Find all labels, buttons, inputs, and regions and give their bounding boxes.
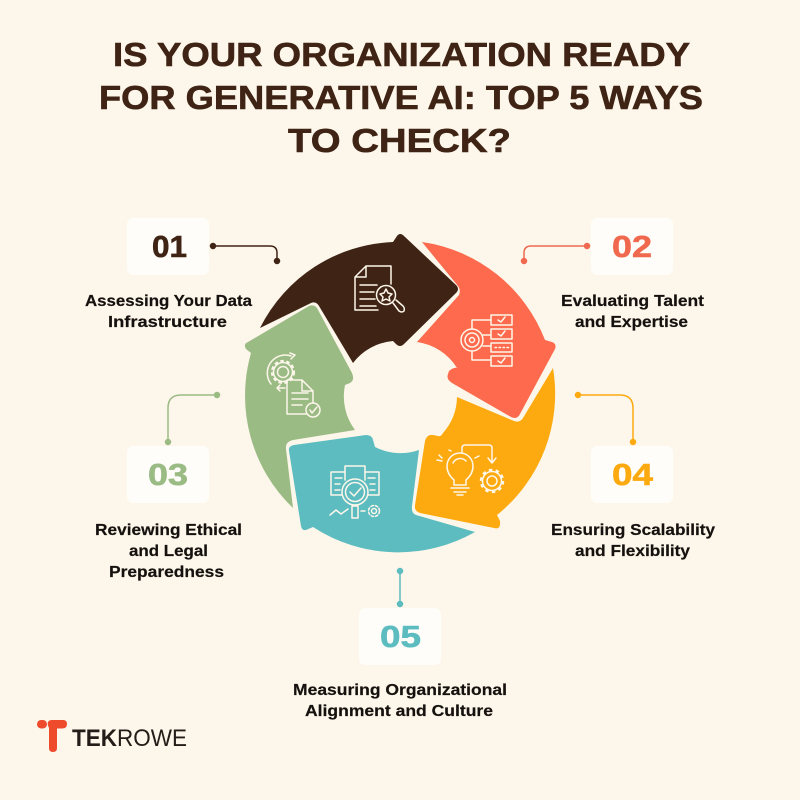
icon: document with star magnifier [355, 266, 404, 312]
card 04: 04 [612, 458, 653, 492]
logo [37, 720, 187, 752]
segment 3: orange arrow [415, 368, 555, 528]
title [99, 37, 703, 160]
connector 04 [576, 392, 636, 444]
label 02 [561, 293, 704, 331]
card 04 [591, 446, 673, 503]
label 05: Alignment and Culture [305, 703, 493, 720]
label 05 [293, 682, 507, 720]
label 01: Assessing Your Data [85, 293, 252, 310]
segment 1: brown arrow [260, 234, 458, 363]
card 03 [127, 446, 209, 503]
icon: target with checklist [461, 315, 512, 366]
cycle diagram [245, 234, 556, 552]
card 01: 01 [152, 230, 187, 264]
icon: gear and document [267, 353, 320, 417]
icon: T mark [37, 720, 67, 752]
label 03: Preparedness [109, 564, 224, 581]
card 05: 05 [380, 620, 421, 654]
label 02: Evaluating Talent [561, 293, 704, 310]
card 01 [127, 218, 209, 275]
connector 02 [522, 244, 590, 264]
label 03: and Legal [129, 543, 208, 560]
label 01 [85, 293, 252, 331]
label 05: Measuring Organizational [293, 682, 507, 699]
card 05 [359, 608, 441, 665]
connector 03 [166, 392, 220, 444]
label 04 [551, 522, 715, 560]
card 03: 03 [148, 458, 188, 492]
title: FOR GENERATIVE AI: TOP 5 WAYS [99, 80, 703, 117]
card 02: 02 [612, 230, 652, 264]
label 04: and Flexibility [575, 543, 690, 560]
title: TO CHECK? [288, 123, 511, 160]
logo wordmark: TEKROWE [72, 725, 187, 752]
segment 2: red arrow [417, 242, 556, 418]
segment 4: teal arrow [289, 435, 475, 552]
connector 05 [398, 568, 402, 606]
label 03 [95, 522, 242, 581]
label 02: and Expertise [575, 314, 688, 331]
connector 01 [210, 244, 280, 264]
label 04: Ensuring Scalability [551, 522, 715, 539]
label 01: Infrastructure [108, 314, 227, 331]
card 02 [591, 218, 673, 275]
icon: light bulb and gear [437, 445, 503, 495]
title: IS YOUR ORGANIZATION READY [113, 37, 690, 74]
icon: magnifier with reports [330, 466, 380, 518]
label 03: Reviewing Ethical [95, 522, 242, 539]
segment 5: green arrow [245, 305, 355, 508]
